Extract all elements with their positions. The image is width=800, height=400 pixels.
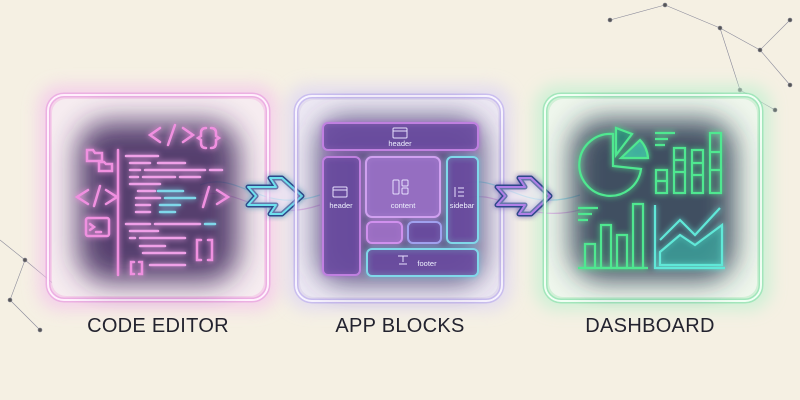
panel: dashboard (545, 95, 761, 301)
label: code editor: CODE EDITOR (87, 315, 229, 337)
panel: code editor (48, 95, 268, 300)
panel: app blocks: sidebar (450, 201, 475, 210)
flow waves (200, 182, 580, 213)
arrow: code to blocks (248, 178, 302, 214)
label: dashboard: DASHBOARD (585, 315, 715, 337)
panel: app blocks (296, 96, 502, 301)
arrow: blocks to dashboard (497, 178, 550, 214)
label: app blocks: APP BLOCKS (335, 315, 465, 337)
panel: app blocks: header (388, 139, 412, 148)
panel: app blocks: header (329, 201, 353, 210)
panel: app blocks: footer (417, 259, 437, 268)
panel: app blocks: content (391, 201, 416, 210)
outer glows (38, 85, 278, 310)
